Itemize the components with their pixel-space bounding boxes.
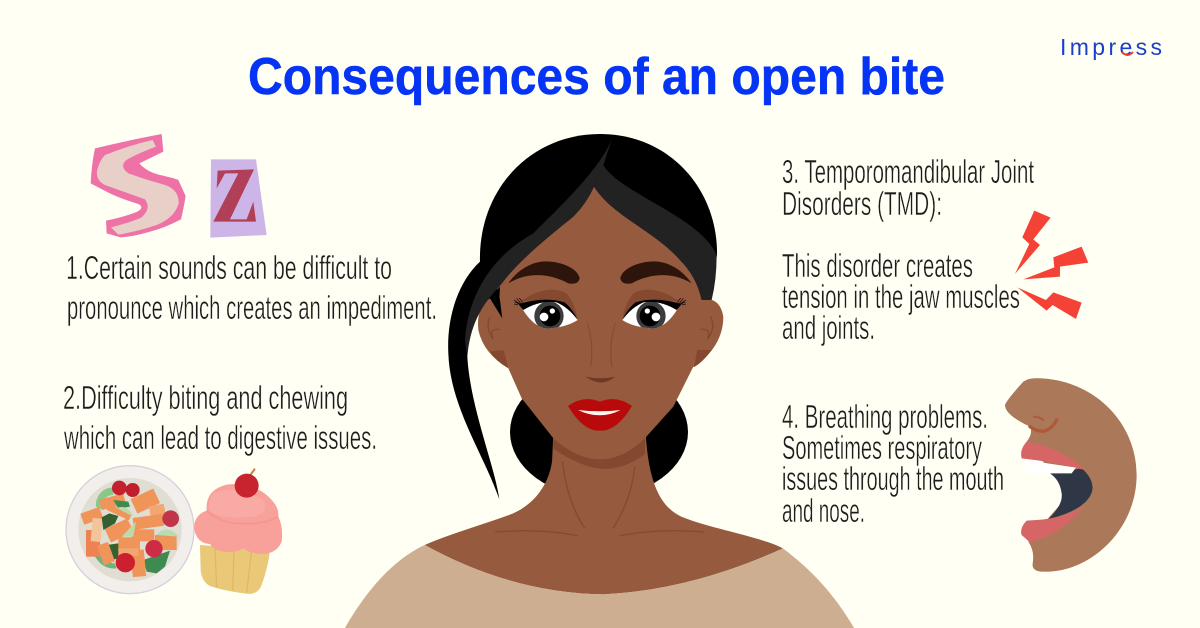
text: point 4 — [782, 398, 1004, 529]
text: point 4: and nose. — [782, 492, 865, 529]
text: point 3 body: and joints. — [782, 309, 875, 346]
icon: paper cutout letter S — [91, 134, 186, 237]
hair: back crown — [480, 134, 717, 350]
logo: Impress: Impress — [1060, 34, 1162, 60]
text: point 3 body: This disorder creates — [782, 247, 973, 284]
text: point 2 — [63, 379, 377, 456]
hair: dark swoop left — [465, 135, 613, 357]
nose — [586, 323, 615, 382]
lips — [568, 399, 632, 431]
icon: cupcake — [194, 469, 282, 594]
text: point 3 heading: Disorders (TMD): — [782, 185, 942, 222]
text: point 4: 4. Breathing problems. — [782, 398, 988, 435]
icon: paper cutout letter Z — [210, 159, 267, 238]
eyebrows — [508, 261, 580, 284]
eye shadows — [520, 290, 577, 318]
text: point 2: which can lead to digestive issues. — [63, 419, 377, 456]
text: point 3 body — [782, 247, 1020, 346]
text: point 1: 1.Certain sounds can be difficult to — [66, 249, 392, 286]
title: Consequences of an open bite — [248, 48, 945, 106]
left eye — [514, 298, 578, 331]
illustration: woman portrait — [344, 134, 855, 628]
face shape — [497, 187, 702, 459]
face, ears and hair — [448, 135, 723, 499]
text: point 1 — [66, 249, 437, 326]
icon: open mouth side profile — [1005, 378, 1137, 572]
right eye — [622, 298, 686, 331]
text: point 3 heading: 3. Temporomandibular Joint — [782, 153, 1034, 190]
text: point 3 heading — [782, 153, 1034, 222]
text: point 4: Sometimes respiratory — [782, 429, 982, 466]
text: point 3 body: tension in the jaw muscles — [782, 278, 1020, 315]
text: point 1: pronounce which creates an impediment. — [67, 289, 437, 326]
text: point 4: issues through the mouth — [782, 460, 1004, 497]
hair: long loose strand — [448, 262, 507, 499]
shoulders and neck — [344, 420, 855, 628]
hair bun — [510, 367, 688, 497]
text: point 2: 2.Difficulty biting and chewing — [63, 379, 348, 416]
icon: salad plate — [66, 466, 194, 594]
hair: dark swoop right — [594, 165, 717, 300]
icon: red pain lightning bolts — [1015, 211, 1088, 319]
